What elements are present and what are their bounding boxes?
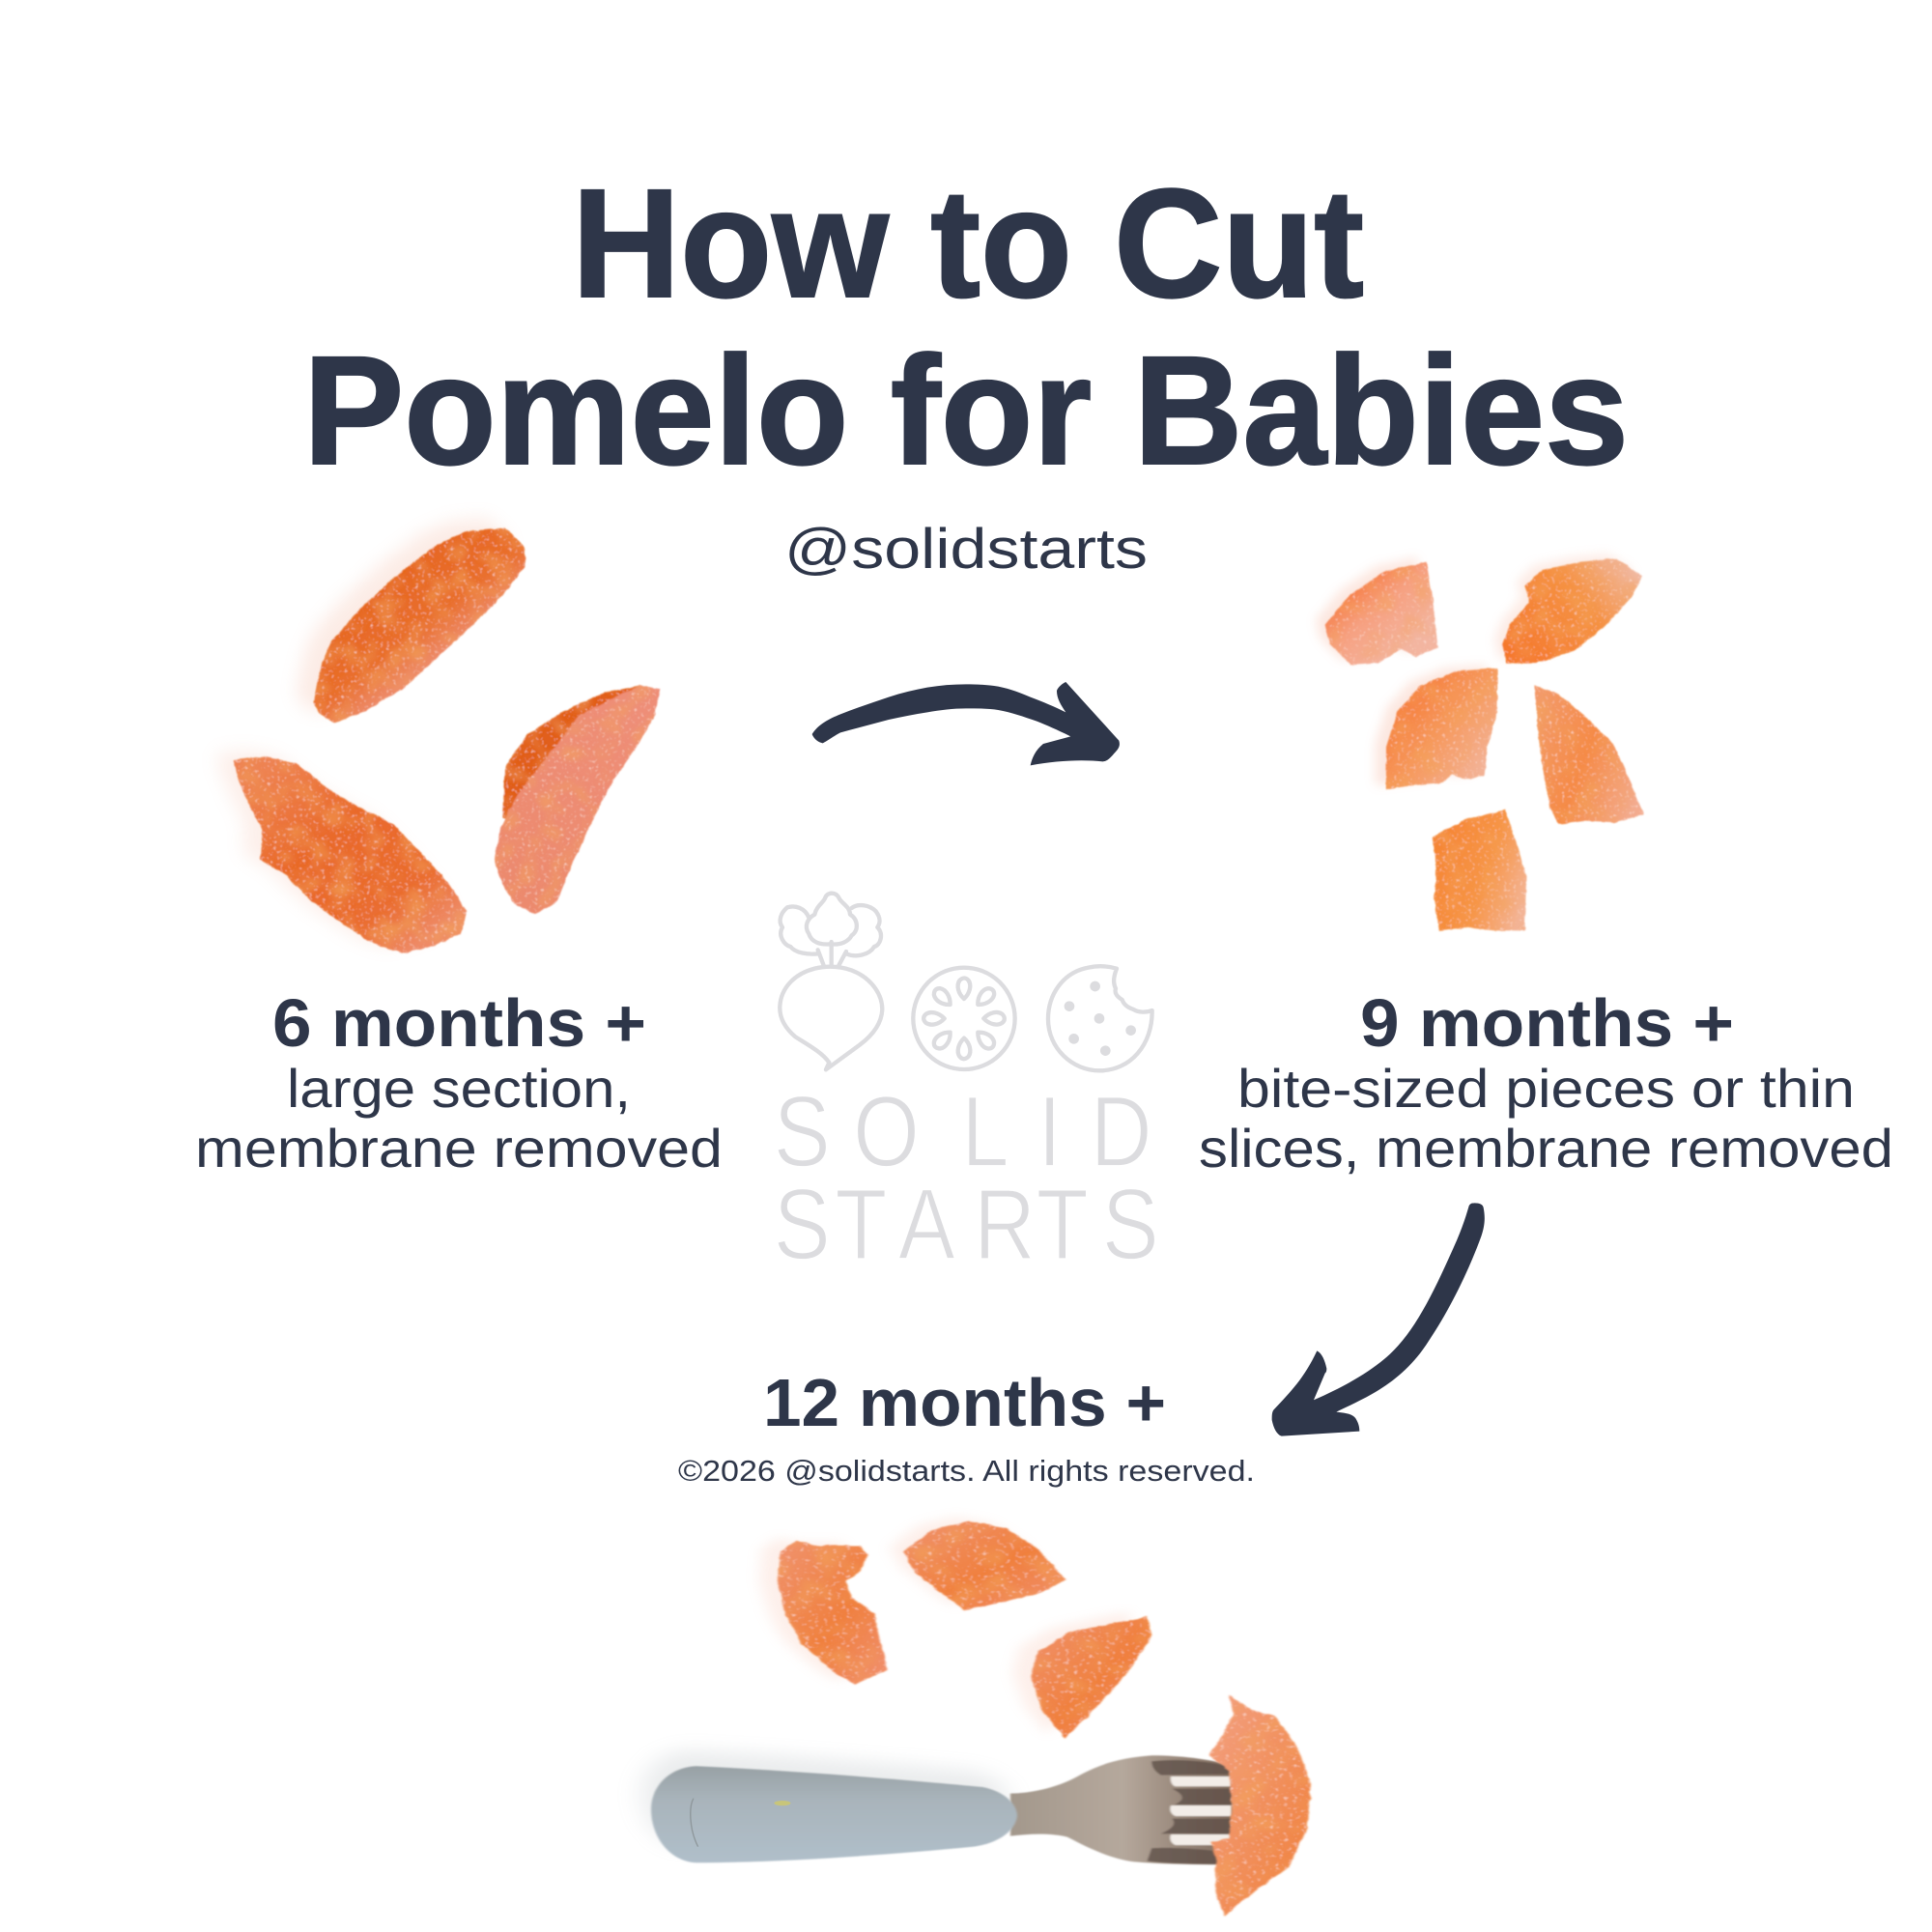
photo: 9 months bite-sized pieces (1316, 554, 1644, 930)
label: 9 months: 9 months + (1360, 985, 1734, 1061)
label: 6 months: large section, (287, 1058, 631, 1119)
arrow: 6 months to 9 months (812, 682, 1120, 765)
photo: 6 months large pomelo sections (215, 519, 660, 953)
pomelo pieces (778, 1521, 1151, 1739)
label: 6 months: membrane removed (195, 1118, 723, 1179)
logo wordmark (774, 1076, 1159, 1281)
logo watermark: Solid Starts (774, 894, 1159, 1281)
fork (651, 1755, 1235, 1864)
photo: 12 months pieces and fork (642, 1517, 1311, 1916)
title: Pomelo for Babies (303, 324, 1629, 497)
label: 9 months (1199, 985, 1893, 1179)
label: 9 months: bite-sized pieces or thin (1237, 1058, 1855, 1119)
label: 6 months (195, 985, 723, 1179)
title: How to Cut (572, 156, 1364, 329)
label: 9 months: slices, membrane removed (1199, 1118, 1893, 1179)
label: 6 months: 6 months + (272, 985, 646, 1061)
logo wordmark: STARTS (774, 1169, 1159, 1281)
handle: @solidstarts: @solidstarts (784, 518, 1148, 581)
icon: bitten cookie (1048, 966, 1152, 1070)
pomelo piece on fork (1208, 1695, 1311, 1916)
arrow: 9 months to 12 months (1272, 1203, 1485, 1436)
label: 12 months: 12 months + (763, 1365, 1166, 1440)
title (303, 156, 1629, 497)
icon: beet (780, 894, 882, 1069)
copyright: ©2026 @solidstarts. All rights reserved. (678, 1454, 1255, 1488)
icon: tomato slice (913, 968, 1015, 1069)
logo wordmark: SOLID (774, 1076, 1152, 1188)
